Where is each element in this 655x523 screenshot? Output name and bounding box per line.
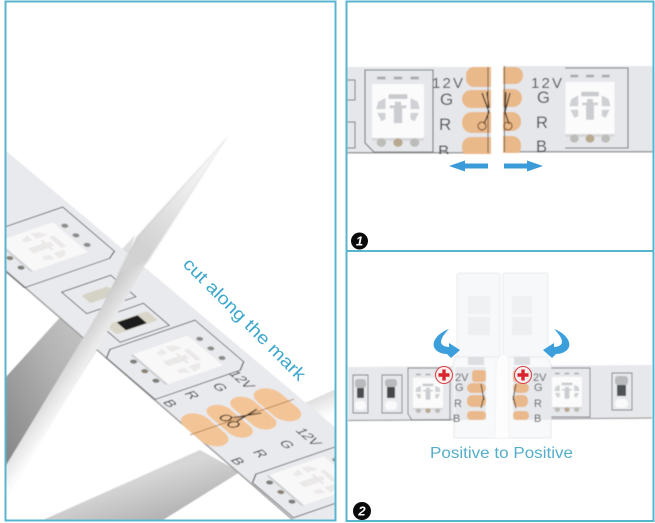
labels: R [249,448,272,459]
second resistor [62,275,136,314]
right LED and frame [251,446,334,519]
connector: centre bar [495,354,509,438]
connector: left window [453,367,486,425]
copper solder pads [180,388,302,447]
right LED and frame [548,368,590,417]
caption: cut along the mark: cut along the mark [179,254,310,385]
right labels [531,75,562,156]
scissor blade tip [122,141,224,268]
panel: step 2 [346,251,654,521]
scissors mark [219,408,262,428]
arrow: left curved [434,329,460,358]
connector: base [453,357,551,438]
caption: positive to positive: Positive to Positive [430,445,573,462]
badge: step 1: 1 [356,234,363,248]
LED strip details, tilted [6,206,334,519]
badge: step 2 [353,502,371,520]
icon: right positive mark [514,366,532,384]
LED strip base [5,150,336,520]
dark scissor blade [6,236,135,466]
right scissors half [505,92,510,124]
left frame [365,70,433,152]
right labels: R [536,114,548,132]
badge: step 1 [351,232,368,250]
labels: G [275,438,299,450]
labels: 12V [225,369,260,391]
connector: right window: 2V [533,372,547,384]
left labels [432,75,463,161]
right frame [565,68,628,148]
right labels: B [536,138,547,156]
resistor right [612,373,632,410]
panel: step 1 [346,2,654,251]
lower scissor blade [43,450,240,520]
labels: B [159,398,181,409]
central LED and frame [101,320,250,399]
icon: left positive mark [436,366,452,384]
left strip piece [348,66,492,155]
right LED [566,75,614,143]
connector: left window: G [455,382,464,394]
left pads [462,66,492,155]
far scissor blade end [306,390,334,414]
labels [162,371,323,466]
arrow: pull right [504,160,543,172]
far left LED and frame [0,207,119,288]
arrow: pull left [449,160,488,172]
connector: left window: R [454,398,462,410]
labels: B [227,456,249,467]
resistors left [353,375,402,413]
left labels: R [439,115,451,134]
LED strip [348,365,652,421]
labels: 12V [292,426,326,448]
right labels: G [537,89,550,107]
left labels: 12V [432,75,463,92]
connector: right window [513,367,551,425]
light scissor blade over strip [5,136,228,502]
resistor [94,303,169,342]
left labels: G [440,90,453,109]
connector: right window: R [534,398,542,410]
connector: top left lid [457,273,500,357]
LED strip lower edge [5,270,293,520]
left scissors half [482,92,489,124]
connector: right window: G [534,382,543,394]
badge: step 2: 2 [357,504,366,518]
cut line [190,399,294,435]
connector: left window: B [453,413,460,425]
panel: cut along the mark [4,0,336,522]
right pads [502,66,524,154]
left LED [372,77,424,147]
connector: right window: B [534,413,541,425]
left labels: B [438,142,449,161]
arrow: right curved [543,329,569,358]
connector: top right lid [503,273,548,357]
labels: G [209,381,232,393]
right strip piece [490,66,653,156]
labels: R [181,389,204,401]
left LED and frame [408,368,450,420]
right labels: 12V [531,75,562,92]
connector: left window: 2V [455,372,469,384]
